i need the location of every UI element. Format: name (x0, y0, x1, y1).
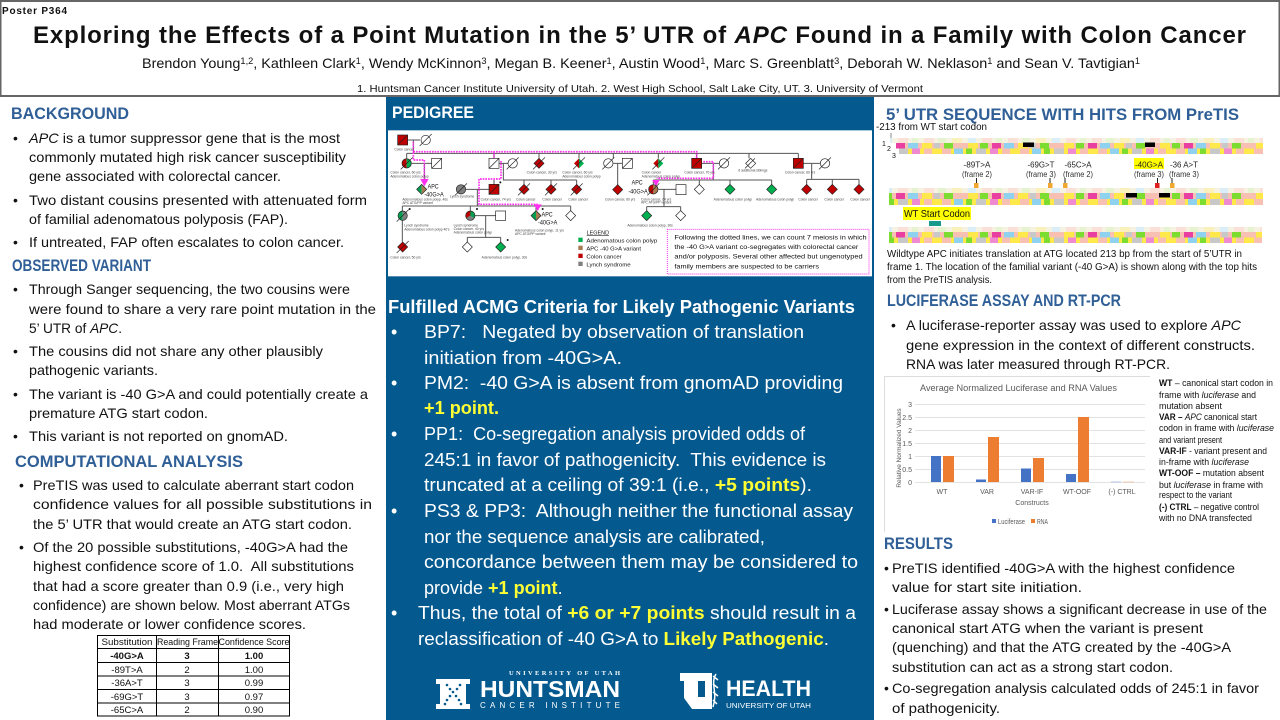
tiny pedigree annotations: Adenomatous colon polyp (390, 174, 429, 178)
table: substitutions and confidence scores: 2 (184, 665, 190, 676)
panel: ACMG criteria: PS3 & PP3: Although neither the functional assay (424, 501, 853, 521)
authors: Brendon Young (142, 55, 238, 71)
panel: background: • (13, 192, 18, 208)
callout: meiosis count: and/or polyposis. Several other affected but ungenotyped (674, 254, 863, 261)
panel: ACMG criteria: initiation from -40G>A. (424, 348, 622, 368)
table: substitutions and confidence scores: -89T>A (111, 665, 143, 676)
legend (578, 230, 657, 268)
panel: computational analysis: had moderate or lower confidence scores. (33, 616, 306, 632)
tiny pedigree annotations: Colon cancer, 64 yrs (641, 197, 672, 201)
tiny pedigree annotations: Colon cancer (798, 197, 819, 201)
panel: ACMG criteria: concordance between them may be considered to (424, 552, 858, 572)
authors: 1 (700, 56, 705, 66)
bar chart: luciferase and RNA: 1.5 (902, 441, 912, 448)
tiny pedigree annotations: Colon cancer, 60 yrs (562, 171, 593, 175)
sequence caption: frame 1. The location of the familial variant (-40 G>A) is shown along with the top hits (887, 261, 1257, 273)
tiny pedigree annotations: APC ATG/PP variant (641, 201, 671, 205)
bar chart: luciferase and RNA: 2.5 (902, 415, 912, 422)
panel: results: of pathogenicity. (892, 700, 1000, 716)
heading: observed variant: OBSERVED VARIANT (12, 257, 151, 275)
panel: computational analysis: the 5’ UTR that would create an ATG start codon. (33, 516, 352, 532)
bar chart: luciferase and RNA: WT-OOF (1063, 489, 1091, 496)
variant labels (424, 180, 648, 226)
tiny pedigree annotations: Lynch syndrome (450, 194, 474, 198)
tiny pedigree annotations: APC ATG/PP variant (402, 201, 433, 205)
bar chart: luciferase and RNA: 3 (908, 402, 912, 409)
panel: luciferase assay and RT-PCR: RNA was later measured through RT-PCR. (906, 356, 1170, 372)
tiny pedigree annotations: Colon cancer (642, 171, 662, 175)
tiny pedigree annotations: Adenomatous colon polyp 40's (404, 227, 450, 231)
heading: computational analysis: COMPUTATIONAL ANALYSIS (15, 453, 243, 471)
sequence caption: from the PreTIS analysis. (887, 274, 992, 286)
panel: background: APC is a tumor suppressor gene that is the most (28, 130, 340, 146)
panel: results (884, 535, 1267, 716)
panel: computational analysis: that had a score greater than 0.9 (i.e., very high (33, 578, 344, 594)
construct definitions: but luciferase in frame with (1159, 480, 1263, 491)
panel: observed variant: • (13, 281, 18, 297)
heading: background: BACKGROUND (11, 105, 129, 123)
construct definitions: codon in frame with luciferase (1159, 423, 1274, 434)
table: substitutions and confidence scores: 3 (184, 692, 190, 703)
heading: ACMG criteria: Fulfilled ACMG Criteria for Likely Pathogenic Variants (388, 296, 855, 317)
tiny pedigree annotations: Adenomatous colon polyp, 30s (482, 255, 528, 259)
panel: background (11, 105, 367, 250)
sequence track 3 (889, 227, 1262, 243)
panel: luciferase assay and RT-PCR: • (891, 317, 896, 333)
hit labels and markers: -69G>T (1028, 160, 1054, 170)
logo: Huntsman Cancer Institute: HUNTSMAN (480, 676, 620, 702)
tiny pedigree annotations: 6 additional siblings (738, 168, 768, 172)
panel: center blue column (386, 97, 874, 720)
family tree connecting lines (402, 140, 859, 242)
panel: ACMG criteria: • (391, 322, 397, 342)
tiny pedigree annotations: Colon cancer, 40 yrs (454, 227, 484, 231)
title: Exploring the Effects of a Point Mutation in the 5’ UTR of APC Found in a Family with Colon Cancer (33, 22, 1246, 49)
table: substitutions and confidence scores (97, 635, 290, 716)
hit labels and markers: -36 A>T (1170, 160, 1198, 170)
tiny pedigree annotations: Colon cancer, 60 yrs (785, 171, 816, 175)
panel: ACMG criteria: provide +1 point. (424, 578, 563, 598)
tiny pedigree annotations: Adenomatous colon polyp, 40s (402, 198, 448, 202)
bar chart: luciferase and RNA: WT (937, 489, 948, 496)
panel: results: (quenching) and that the ATG created by the -40G>A (892, 639, 1232, 655)
hit labels and markers: (frame 3) (1169, 170, 1199, 179)
tiny pedigree annotations (390, 147, 871, 259)
table: substitutions and confidence scores: 1.00 (245, 665, 263, 676)
panel: computational analysis: highest confidence score of 1.0. All substitutions (33, 558, 354, 574)
authors: 1 (356, 56, 361, 66)
authors: 3 (834, 56, 839, 66)
panel: observed variant (12, 257, 376, 444)
authors: , Wendy McKinnon (361, 55, 481, 71)
authors: and Sean V. Tavtigian (992, 55, 1135, 71)
tiny pedigree annotations: Adenomatous colon polyp (562, 174, 601, 178)
panel: computational analysis: Of the 20 possible substitutions, -40G>A had the (33, 539, 348, 555)
panel: computational analysis: confidence) are shown below. Most aberrant ATGs (33, 597, 350, 613)
construct definitions (1158, 378, 1274, 524)
panel: results: substitution can act as a strong start codon. (892, 659, 1173, 675)
tiny pedigree annotations: Colon cancer (824, 197, 845, 201)
construct definitions: in-frame with luciferase (1159, 457, 1249, 468)
variant labels: -40G>A (628, 188, 648, 195)
panel: 5' UTR sequence with PreTIS hits (876, 106, 1263, 286)
bar chart: luciferase and RNA: Constructs (1015, 500, 1049, 507)
authors: , Megan B. Keener (487, 55, 607, 71)
construct definitions: respect to the variant (1159, 490, 1232, 501)
panel: observed variant: pathogenic variants. (29, 362, 158, 378)
panel: ACMG criteria: +1 point. (424, 398, 499, 418)
table: substitutions and confidence scores: 3 (184, 678, 190, 689)
table: substitutions and confidence scores: 0.99 (245, 678, 263, 689)
panel: background: gene associated with colorectal cancer. (29, 168, 281, 184)
table: substitutions and confidence scores: Reading Frame (157, 637, 218, 648)
panel: observed variant: 5’ UTR of APC. (29, 320, 122, 336)
chart legend: Luciferase (998, 519, 1025, 526)
construct definitions: mutation absent (1159, 401, 1222, 412)
icon: helix H (436, 679, 470, 709)
logo: University of Utah Health: UNIVERSITY OF UTAH (726, 701, 811, 710)
logo: University of Utah Health: HEALTH (726, 676, 811, 701)
tiny pedigree annotations: Colon cancer (516, 197, 537, 201)
tiny pedigree annotations: Adenomatous colon polyp, 11 yrs (515, 229, 564, 233)
panel: results: Luciferase assay shows a significant decrease in use of the (892, 601, 1267, 617)
luciferase bars (931, 456, 1121, 482)
tiny pedigree annotations: Colon cancer (568, 197, 589, 201)
panel: computational analysis: confidence values for all possible substitutions in (33, 496, 372, 512)
bar chart: luciferase and RNA: VAR (980, 489, 994, 496)
panel: observed variant: were found to share a very rare point mutation in the (28, 301, 376, 317)
callout: meiosis count (667, 229, 869, 274)
panel: ACMG criteria: nor the sequence analysis are calibrated, (424, 527, 765, 547)
construct definitions: WT-OOF – mutation absent (1159, 468, 1264, 479)
authors: 1 (607, 56, 612, 66)
icon: block U with DNA (680, 673, 718, 709)
chart legend (992, 519, 1048, 526)
construct definitions: with no DNA transfected (1158, 513, 1252, 524)
construct definitions: frame with luciferase and (1159, 390, 1256, 401)
sequence track 2 (889, 188, 1263, 205)
heading: pedigree: PEDIGREE (392, 104, 474, 122)
dotted co-segregation path (413, 142, 713, 204)
panel: ACMG criteria: truncated at a ceiling of 39:1 (i.e., +5 points ). (424, 475, 812, 495)
construct definitions: and variant present (1159, 435, 1222, 446)
panel: observed variant: The cousins did not share any other plausibly (29, 343, 323, 359)
variant labels: APC (428, 184, 439, 191)
panel: observed variant: The variant is -40 G>A and could potentially create a (29, 386, 368, 402)
tiny pedigree annotations: Adenomatous colon polyp (756, 198, 794, 202)
table: substitutions and confidence scores: 0.97 (245, 692, 263, 703)
tiny pedigree annotations: Lynch syndrome (454, 224, 478, 228)
panel: ACMG criteria: reclassification of -40 G>A to Likely Pathogenic . (418, 629, 829, 649)
variant labels: APC (542, 212, 553, 219)
table: substitutions and confidence scores: -40G>A (110, 651, 144, 662)
panel: luciferase assay and RT-PCR: A luciferase-reporter assay was used to explore APC (906, 317, 1242, 333)
panel: computational analysis: • (19, 539, 24, 555)
construct definitions: (-) CTRL – negative control (1159, 502, 1259, 513)
bar chart: luciferase and RNA: VAR-IF (1021, 489, 1043, 496)
panel: ACMG criteria: 245:1 in favor of pathogenicity. This evidence is (424, 450, 826, 470)
legend: Colon cancer (586, 254, 622, 260)
panel: ACMG criteria: • (391, 424, 397, 444)
panel: results: • (884, 560, 889, 576)
panel: luciferase assay and RT-PCR: gene expression in the context of different constructs. (906, 337, 1255, 353)
table: substitutions and confidence scores: 0.90 (245, 705, 263, 716)
panel: observed variant: Through Sanger sequencing, the two cousins were (29, 281, 350, 297)
WT start codon highlight: WT Start Codon (904, 208, 970, 220)
hit labels and markers: -40G>A (1135, 160, 1163, 170)
table: substitutions and confidence scores: Substitution (102, 637, 152, 648)
heading: results: RESULTS (884, 535, 953, 553)
panel: luciferase assay and RT-PCR (887, 292, 1255, 372)
panel: ACMG criteria: BP7: Negated by observation of translation (424, 322, 804, 342)
hit labels and markers (962, 158, 1199, 188)
hit labels and markers: (frame 3) (1026, 170, 1056, 179)
poster number: Poster P364 (2, 6, 67, 17)
callout: meiosis count: family members are suspected to be carriers (674, 263, 819, 270)
panel: ACMG criteria (388, 296, 858, 649)
tiny pedigree annotations: Colon cancer, 30 yrs (527, 171, 557, 175)
tiny pedigree annotations: Colon cancer, 60 yrs (390, 171, 421, 175)
tiny pedigree annotations: Colon cancer (850, 197, 871, 201)
table: substitutions and confidence scores: -69G>T (111, 692, 143, 703)
tiny pedigree annotations: Colon cancer (394, 147, 415, 151)
panel: results: • (884, 601, 889, 617)
panel: computational analysis (15, 453, 372, 632)
legend: LEGEND (587, 230, 609, 236)
panel: ACMG criteria: • (391, 501, 397, 521)
header banner (0, 1, 1280, 96)
hit labels and markers: -65C>A (1064, 160, 1092, 170)
panel: results: value for start site initiation. (892, 579, 1082, 595)
table: substitutions and confidence scores: -36A>T (111, 678, 143, 689)
panel: ACMG criteria: Thus, the total of +6 or +7 points should result in a (418, 603, 857, 623)
tiny pedigree annotations: Colon cancer, 60 yrs (605, 197, 636, 201)
panel: observed variant: This variant is not reported on gnomAD. (29, 428, 288, 444)
bar chart: luciferase and RNA (884, 376, 1150, 532)
authors: 1,2 (240, 56, 253, 66)
panel: ACMG criteria: • (391, 373, 397, 393)
authors: , Austin Wood (612, 55, 700, 71)
legend: APC -40 G>A variant (586, 246, 641, 252)
RNA bars (943, 417, 1134, 482)
bar chart: luciferase and RNA: 2 (908, 428, 912, 435)
authors: 3 (481, 56, 487, 66)
panel: background: If untreated, FAP often escalates to colon cancer. (29, 234, 344, 250)
sequence track 1 (890, 138, 1263, 154)
tiny pedigree annotations: APC ATG/PP variant (515, 232, 545, 236)
tiny pedigree annotations: Adenomatous colon polyp (642, 174, 680, 178)
authors: , Marc S. Greenblatt (705, 55, 834, 71)
affiliations: 1. Huntsman Cancer Institute University of Utah. 2. West High School, Salt Lake City, UT. 3. University of Vermont (357, 83, 923, 95)
tiny pedigree annotations: Adenomatous colon polyp (454, 230, 492, 234)
authors: , Deborah W. Neklason (839, 55, 987, 71)
tiny pedigree annotations: Colon cancer (542, 197, 563, 201)
tiny pedigree annotations: Colon cancer, 74 yrs (481, 197, 511, 201)
callout: meiosis count: Following the dotted lines, we can count 7 meiosis in which (674, 234, 867, 241)
hit labels and markers: -89T>A (964, 160, 991, 170)
panel: observed variant: premature ATG start codon. (29, 405, 208, 421)
construct definitions: VAR – APC canonical start (1159, 412, 1257, 423)
authors: 1 (987, 56, 992, 66)
panel: ACMG criteria: PM2: -40 G>A is absent from gnomAD providing (424, 373, 843, 393)
bar chart: luciferase and RNA: 0.5 (902, 467, 912, 474)
callout: meiosis count: the -40 G>A variant co-segregates with colorectal cancer (674, 244, 858, 251)
table: substitutions and confidence scores: -65C>A (111, 705, 144, 716)
legend: Adenomatous colon polyp (586, 238, 657, 244)
sequence caption (887, 248, 1257, 286)
table: substitutions and confidence scores: 1.00 (245, 651, 263, 662)
panel: observed variant: • (13, 428, 18, 444)
heading: sequence: 5’ UTR SEQUENCE WITH HITS FROM PreTIS (886, 106, 1239, 124)
panel: background: • (13, 234, 18, 250)
chart legend: RNA (1037, 519, 1048, 526)
pedigree symbols (397, 134, 864, 253)
panel: computational analysis: • (19, 477, 24, 493)
pedigree chart (388, 130, 872, 276)
logo: Huntsman Cancer Institute: CANCER INSTITUTE (480, 701, 620, 710)
panel: computational analysis: PreTIS was used to calculate aberrant start codon (33, 477, 354, 493)
panel: results: Co-segregation analysis calculated odds of 245:1 in favor (892, 680, 1259, 696)
logo: Huntsman Cancer Institute (436, 670, 620, 710)
tiny pedigree annotations: Colon cancer, 70 yrs (684, 171, 715, 175)
WT start codon highlight (903, 207, 971, 226)
panel: background: commonly mutated high risk cancer susceptibility (29, 149, 346, 165)
heading: luciferase: LUCIFERASE ASSAY AND RT-PCR (887, 292, 1121, 310)
logo: University of Utah Health (680, 673, 811, 710)
hit labels and markers: (frame 2) (962, 170, 992, 179)
panel: observed variant: • (13, 343, 18, 359)
legend: Lynch syndrome (586, 262, 631, 268)
hit labels and markers: (frame 3) (1134, 170, 1164, 179)
bar chart: luciferase and RNA: (-) CTRL (1108, 489, 1136, 496)
panel: 5' UTR sequence with PreTIS hits: 1 (882, 141, 886, 148)
panel: ACMG criteria: PP1: Co-segregation analysis provided odds of (424, 424, 806, 444)
tiny pedigree annotations: Lynch syndrome (404, 224, 429, 228)
bar chart: luciferase and RNA: Relative Normalized Values (896, 408, 903, 488)
table: substitutions and confidence scores: 3 (184, 651, 190, 662)
variant labels: -40G>A (538, 219, 558, 226)
panel: results: PreTIS identified -40G>A with the highest confidence (892, 560, 1235, 576)
tiny pedigree annotations: Colon cancer, 50 yrs (390, 255, 421, 259)
panel: 5' UTR sequence with PreTIS hits: 3 (892, 153, 896, 160)
start position label: -213 from WT start codon (876, 122, 987, 133)
tiny pedigree annotations: Adenomatous colon polyp (714, 198, 752, 202)
tiny pedigree annotations: Adenomatous colon polyp, 30s (627, 224, 673, 228)
sequence caption: Wildtype APC initiates translation at ATG located 213 bp from the start of 5’UTR in (887, 248, 1242, 260)
panel: results: • (884, 680, 889, 696)
panel: background: Two distant cousins presented with attenuated form (29, 192, 367, 208)
hit labels and markers: (frame 2) (1063, 170, 1093, 179)
arrowheads (420, 179, 660, 211)
construct definitions: VAR-IF - variant present and (1159, 446, 1267, 457)
panel: 5' UTR sequence with PreTIS hits: 2 (887, 146, 891, 153)
panel: background: • (13, 130, 18, 146)
panel: results: canonical start ATG when the variant is present (892, 620, 1203, 636)
bar chart: luciferase and RNA: 1 (908, 454, 912, 461)
table: substitutions and confidence scores: 2 (184, 705, 190, 716)
table: substitutions and confidence scores: Confidence Score (218, 637, 290, 648)
authors: , Kathleen Clark (253, 55, 357, 71)
variant labels: -40G>A (424, 192, 444, 199)
panel: observed variant: • (13, 386, 18, 402)
panel: background: of familial adenomatous polyposis (FAP). (29, 211, 288, 227)
variant labels: APC (632, 180, 643, 187)
panel: ACMG criteria: • (391, 603, 397, 623)
bar chart: luciferase and RNA: 0 (908, 480, 912, 487)
bar chart: luciferase and RNA: Average Normalized Luciferase and RNA Values (920, 383, 1117, 393)
authors: 1 (1135, 56, 1140, 66)
logo: Huntsman Cancer Institute: UNIVERSITY OF UTAH (509, 670, 620, 677)
